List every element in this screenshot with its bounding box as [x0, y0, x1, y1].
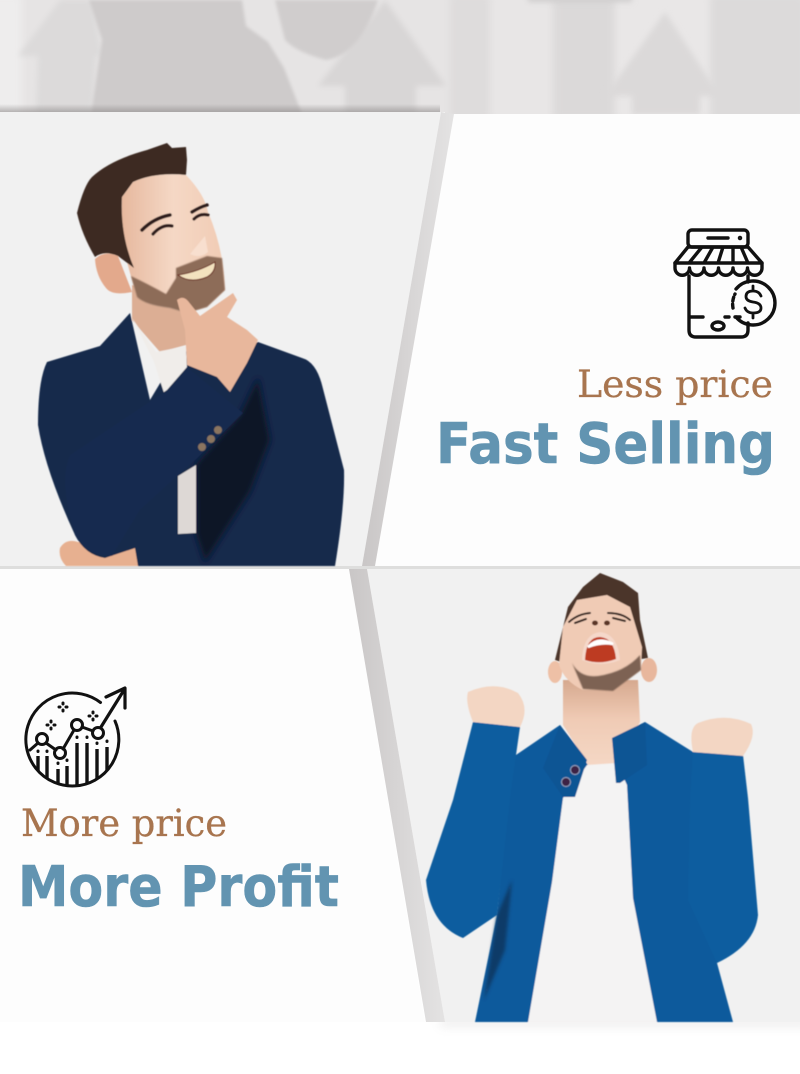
face — [559, 595, 642, 690]
heading: Fast Selling: Fast Selling — [436, 412, 775, 477]
shirt lower strip — [178, 465, 196, 534]
label: Less price: Less price — [577, 363, 773, 406]
right sleeve — [688, 752, 758, 963]
panel: top left grey — [0, 112, 441, 566]
shirt — [132, 318, 187, 396]
slanted divider bottom — [349, 569, 445, 1022]
label: More price: More price — [21, 802, 227, 845]
undershirt — [528, 763, 657, 1022]
panel: top right white — [375, 114, 800, 566]
circle outline — [26, 693, 119, 786]
bars — [38, 743, 107, 790]
beard — [131, 256, 225, 313]
phone body — [689, 276, 748, 337]
bar dots — [38, 737, 107, 764]
horizontal divider — [0, 566, 800, 569]
lips — [582, 632, 620, 664]
left fist — [467, 686, 525, 727]
smile — [178, 262, 215, 280]
panel: bottom right grey — [367, 569, 800, 1022]
face — [122, 174, 225, 313]
beard — [572, 655, 641, 691]
blazer — [38, 313, 344, 566]
hair — [555, 573, 648, 665]
icon: growth chart in circle with arrow — [26, 688, 125, 790]
hair — [77, 143, 187, 268]
brows and eyes — [569, 613, 630, 623]
nose — [190, 236, 208, 256]
open mouth — [585, 637, 616, 662]
right collar flap — [612, 722, 647, 783]
coin — [736, 281, 775, 325]
icon: mobile shop with dollar coin — [675, 230, 775, 337]
trend line — [30, 727, 93, 750]
buttons — [198, 426, 222, 451]
hand behind arm — [60, 541, 138, 566]
hand on chin — [177, 293, 258, 392]
ears — [548, 661, 562, 683]
ear — [95, 254, 132, 293]
awning — [675, 247, 762, 263]
photo: cheering man in blue jacket — [426, 573, 758, 1022]
neck — [563, 680, 640, 768]
nostrils — [592, 620, 598, 626]
heading: More Profit: More Profit — [18, 855, 339, 920]
left sleeve — [426, 722, 520, 938]
neck — [132, 285, 190, 352]
soft shadow under bottom panel — [440, 1020, 800, 1026]
left collar flap — [543, 725, 587, 797]
arrow — [101, 688, 125, 727]
blazer dark interior — [196, 378, 270, 562]
panel: bottom left white — [0, 569, 425, 1022]
teeth — [588, 641, 613, 647]
banner: faded photo of arrows and figure — [0, 0, 800, 120]
shop sign — [688, 230, 748, 247]
jacket body — [475, 722, 733, 1022]
photo: thinking man in navy blazer — [38, 143, 344, 566]
sleeve — [65, 367, 243, 556]
right fist — [691, 718, 753, 756]
sparkles — [47, 703, 97, 729]
slanted divider top — [362, 112, 454, 566]
eyes and brows — [142, 205, 208, 234]
jacket buttons — [562, 766, 580, 786]
jacket shadow — [484, 880, 512, 1000]
